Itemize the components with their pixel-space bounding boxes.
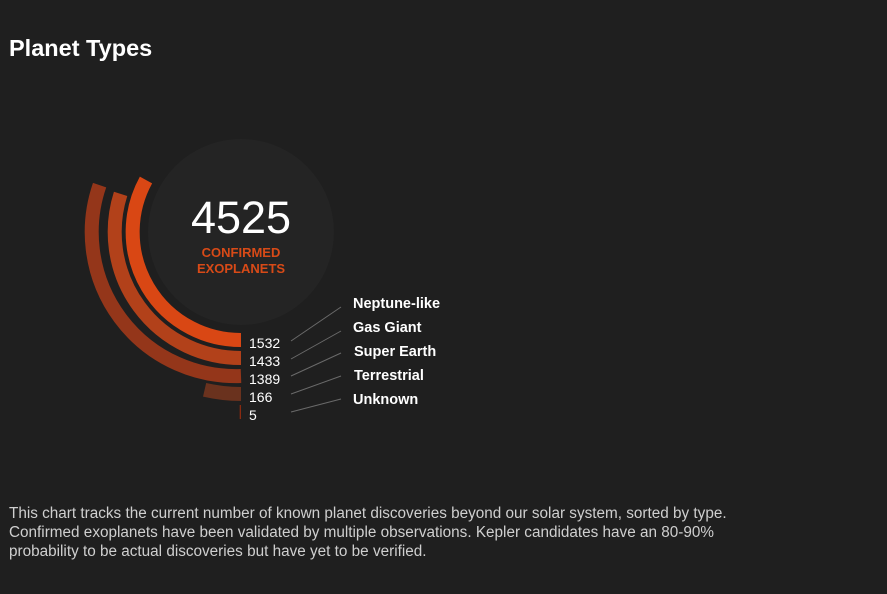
category labels: Super Earth [354, 344, 436, 360]
center circle: EXOPLANETS [197, 261, 285, 276]
leader lines [291, 307, 341, 412]
center circle [148, 139, 334, 325]
arc: Terrestrial 166 [205, 390, 241, 394]
values: 5 [249, 407, 257, 423]
description text: This chart tracks the current number of known planet discoveries beyond our solar system, sorted by type. Confirmed exoplanets have been validated by multiple observations. Kepler candidates have an 80-90% probability to be actual discoveries but have yet to be verified. [9, 505, 727, 560]
center circle: 4525 [191, 192, 291, 243]
category labels: Neptune-like [353, 296, 440, 312]
category labels: Terrestrial [354, 368, 424, 384]
values: 166 [249, 389, 273, 405]
title: Planet Types [9, 35, 152, 61]
category labels: Gas Giant [353, 320, 422, 336]
arc: Gas Giant 1433 [115, 194, 241, 358]
arc: Unknown 5 [240, 405, 241, 419]
category labels: Unknown [353, 392, 418, 408]
category labels [353, 296, 440, 408]
values [249, 335, 280, 423]
arc: Neptune-like 1532 [133, 180, 241, 340]
arc: Super Earth 1389 [92, 185, 241, 376]
values: 1532 [249, 335, 280, 351]
values: 1433 [249, 353, 280, 369]
center circle: CONFIRMED [202, 245, 280, 260]
values: 1389 [249, 371, 280, 387]
